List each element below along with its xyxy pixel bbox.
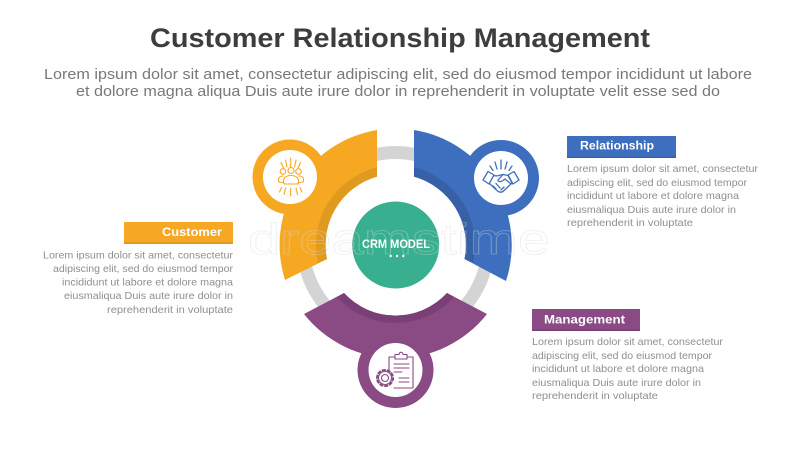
text: customer: eiusmaliqua Duis aute irure dolor in <box>64 290 233 302</box>
centre circle <box>352 202 439 288</box>
label: customer: Customer <box>162 225 222 239</box>
text: management: eiusmaliqua Duis aute irure dolor in <box>532 377 701 389</box>
text: relationship: reprehenderit in voluptate <box>567 217 693 229</box>
label: relationship <box>567 136 676 158</box>
text: relationship: eiusmaliqua Duis aute irure dolor in <box>567 204 736 216</box>
subtitle: et dolore magna aliqua Duis aute irure dolor in reprehenderit in voluptate velit esse sed do <box>76 83 720 100</box>
segment: management <box>304 293 487 408</box>
label: relationship: Relationship <box>580 138 654 152</box>
text: relationship: adipiscing elit, sed do eiusmod tempor <box>567 177 747 189</box>
title: Customer Relationship Management <box>150 23 650 53</box>
text: relationship: incididunt ut labore et dolore magna <box>567 190 739 202</box>
segment: relationship <box>414 130 539 281</box>
text: customer <box>43 250 234 316</box>
icon: customer group <box>278 158 304 196</box>
text: customer: adipiscing elit, sed do eiusmod tempor <box>53 263 233 275</box>
grey ring <box>303 152 488 338</box>
text: management: incididunt ut labore et dolore magna <box>532 363 704 375</box>
text: management <box>532 336 724 402</box>
text: customer: reprehenderit in voluptate <box>107 304 233 316</box>
segment: customer <box>252 130 377 280</box>
icon: handshake <box>483 160 519 192</box>
text: management: Lorem ipsum dolor sit amet, consectetur <box>532 336 724 348</box>
subtitle <box>44 66 752 100</box>
watermark: dreamstime <box>248 215 550 264</box>
subtitle: Lorem ipsum dolor sit amet, consectetur adipiscing elit, sed do eiusmod tempor incididunt ut labore <box>44 66 752 83</box>
text: customer: incididunt ut labore et dolore magna <box>62 276 233 288</box>
label: management: Management <box>544 312 625 326</box>
centre circle: CRM MODEL <box>362 239 430 251</box>
text: management: reprehenderit in voluptate <box>532 390 658 402</box>
text: customer: Lorem ipsum dolor sit amet, consectetur <box>43 250 234 262</box>
text: relationship: Lorem ipsum dolor sit amet, consectetur <box>567 163 759 175</box>
label: management <box>532 309 640 331</box>
icon: clipboard and gear <box>377 352 413 388</box>
label: customer <box>124 222 233 244</box>
text: management: adipiscing elit, sed do eiusmod tempor <box>532 350 712 362</box>
text: relationship <box>567 163 759 229</box>
